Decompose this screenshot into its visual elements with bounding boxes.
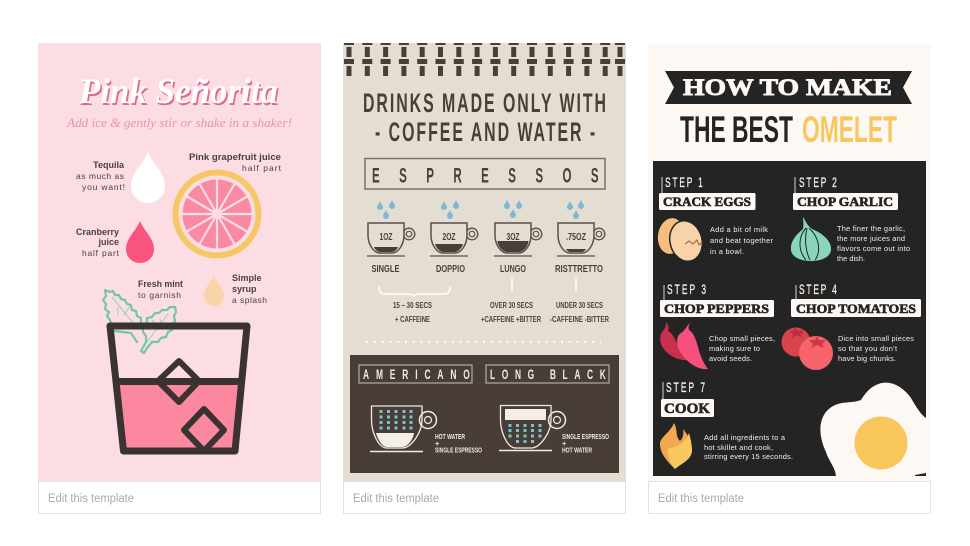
- text: step 1 body: and beat together: [710, 236, 774, 245]
- label: tequila: as much as: [76, 171, 124, 181]
- text: step 7 body: Add all ingredients to a: [704, 433, 786, 442]
- text: step 3 body: Chop small pieces,: [709, 334, 775, 343]
- drink: single: [367, 200, 415, 275]
- label: americano recipe: [435, 432, 482, 454]
- heading: the best omelet: OMELET: [802, 109, 897, 150]
- label: grapefruit juice: [189, 152, 282, 173]
- label: long black recipe: SINGLE ESPRESSO: [562, 432, 609, 441]
- text: step 1 body: [710, 225, 774, 256]
- text: step 1 body: Add a bit of milk: [710, 225, 768, 234]
- icon: long black cup: [499, 406, 566, 450]
- icon: garlic: [791, 217, 831, 261]
- label: tequila: you want!: [82, 182, 125, 192]
- label: cranberry juice: Cranberry: [76, 227, 119, 237]
- chart-like illustration: cocktail glass: [110, 326, 247, 451]
- text: step 7 body: hot skillet and cook,: [704, 443, 773, 452]
- icon: mint leaves: [103, 290, 176, 353]
- text: step 7 body: [704, 433, 793, 461]
- footer: edit template 1: [38, 482, 320, 514]
- icon: syrup drop: [204, 275, 224, 306]
- heading: drinks made only with coffee and water: DRINKS MADE ONLY WITH: [363, 88, 606, 118]
- icon: fried egg: [820, 383, 926, 477]
- footer: edit template 1: Edit this template: [48, 493, 134, 505]
- caption: single and doppio timing: + CAFFEINE: [395, 315, 430, 324]
- label: fresh mint: Fresh mint: [138, 279, 183, 289]
- text: step 4 body: so that you don't: [838, 344, 897, 353]
- icon: grapefruit slice: [176, 172, 258, 256]
- drink: doppio: 2OZ: [442, 232, 456, 243]
- label: long black recipe: [562, 432, 609, 454]
- icon: tomatoes: [782, 327, 833, 370]
- dark steps panel: [653, 161, 926, 477]
- banner: how to make: [665, 71, 912, 104]
- label: simple syrup: syrup: [232, 284, 257, 294]
- drink: single: 1OZ: [380, 232, 392, 243]
- label: americano recipe: SINGLE ESPRESSO: [435, 446, 482, 454]
- label: tequila: Tequila: [93, 160, 125, 170]
- icon: americano cup: [370, 406, 436, 452]
- drink: ristretto: RISTTRETTO: [555, 264, 603, 275]
- heading: drinks made only with coffee and water: [363, 88, 606, 147]
- text: step 2 body: flavors come out into: [837, 244, 910, 253]
- decorative top pattern: [344, 43, 625, 76]
- icon: eggs: [656, 216, 706, 265]
- text: step 4 body: Dice into small pieces: [838, 334, 914, 343]
- label: americano recipe: +: [435, 439, 440, 448]
- label: simple syrup: Simple: [232, 273, 262, 283]
- label: long black recipe: HOT WATER: [562, 446, 592, 454]
- label: tequila: [76, 160, 125, 192]
- step 7: cook: [660, 381, 793, 469]
- panel: how to make the best omelet: [648, 43, 931, 481]
- step 3: chop peppers: CHOP PEPPERS: [664, 301, 769, 316]
- label: long black recipe: +: [562, 439, 567, 448]
- text: step 3 body: avoid seeds.: [709, 354, 752, 363]
- label: simple syrup: [232, 273, 267, 305]
- heading: drinks made only with coffee and water: - COFFEE AND WATER -: [375, 117, 595, 147]
- footer: edit template 2: [344, 482, 626, 514]
- title: Pink Senorita: Pink Señorita: [80, 73, 279, 113]
- heading box: espressos: ESPRESSOS: [372, 164, 599, 187]
- drink: doppio: [430, 200, 478, 275]
- drink: doppio: DOPPIO: [436, 264, 465, 275]
- drink: lungo: [494, 200, 542, 275]
- title: Pink Senorita: Pink Señorita: [78, 71, 278, 111]
- caption: single and doppio timing: [393, 301, 433, 324]
- step 2: chop garlic: CHOP GARLIC: [797, 194, 893, 209]
- step 1: crack eggs: [656, 176, 774, 265]
- footer: edit template 3: Edit this template: [658, 493, 744, 505]
- caption: ristretto timing: UNDER 30 SECS: [556, 301, 603, 310]
- heading: the best omelet: THE BEST: [680, 109, 793, 150]
- panel: americano and long black: [350, 355, 619, 473]
- label: cranberry juice: half part: [82, 248, 120, 258]
- label: fresh mint: to garnish: [138, 290, 181, 300]
- caption: lungo timing: +CAFFEINE +BITTER: [481, 315, 541, 324]
- step 4: chop tomatoes: STEP 4: [799, 283, 837, 298]
- drink: lungo: 3OZ: [506, 232, 520, 243]
- text: step 3 body: [709, 334, 775, 363]
- step 3: chop peppers: [660, 283, 775, 369]
- text: step 2 body: The finer the garlic,: [837, 224, 905, 233]
- step 7: cook: COOK: [664, 401, 710, 417]
- heading box: long black: LONG BLACK: [490, 368, 606, 383]
- text: step 2 body: [837, 224, 910, 263]
- text: step 4 body: have big chunks.: [838, 354, 896, 363]
- step 1: crack eggs: CRACK EGGS: [663, 194, 751, 209]
- text: step 1 body: in a bowl.: [710, 247, 744, 256]
- subtitle: Add ice & gently stir or shake in a shaker!: [66, 116, 292, 130]
- caption: ristretto timing: -CAFFEINE -BITTER: [550, 315, 609, 324]
- step 2: chop garlic: [791, 176, 910, 263]
- banner: how to make: HOW TO MAKE: [683, 75, 892, 100]
- drink: ristretto: [555, 200, 605, 275]
- heading box: americano: AMERICANO: [363, 368, 470, 383]
- brackets and connectors: [379, 279, 576, 296]
- label: simple syrup: a splash: [232, 295, 267, 305]
- text: step 4 body: [838, 334, 914, 363]
- step 3: chop peppers: STEP 3: [667, 283, 706, 298]
- icon: cranberry drop: [126, 221, 154, 263]
- caption: lungo timing: OVER 30 SECS: [490, 301, 533, 310]
- drink: lungo: LUNGO: [500, 264, 526, 275]
- footer: edit template 2: Edit this template: [353, 493, 439, 505]
- panel: espresso drinks guide: [343, 43, 626, 481]
- step 4: chop tomatoes: CHOP TOMATOES: [796, 301, 916, 316]
- text: step 2 body: the more juices and: [837, 234, 905, 243]
- caption: lungo timing: [481, 301, 541, 324]
- panel: Pink Senorita cocktail recipe: [38, 43, 321, 481]
- label: cranberry juice: juice: [97, 237, 119, 247]
- icon: white tequila drop: [131, 152, 165, 203]
- text: step 3 body: making sure to: [709, 344, 760, 353]
- step 2: chop garlic: STEP 2: [799, 176, 837, 191]
- label: americano recipe: HOT WATER: [435, 432, 465, 441]
- text: step 2 body: the dish.: [837, 254, 865, 263]
- label: fresh mint: [138, 279, 183, 300]
- caption: single and doppio timing: 15 – 30 SECS: [393, 301, 433, 310]
- step 7: cook: STEP 7: [666, 381, 705, 396]
- step 4: chop tomatoes: [782, 283, 921, 370]
- label: grapefruit juice: half part: [242, 163, 282, 173]
- label: grapefruit juice: Pink grapefruit juice: [189, 152, 281, 162]
- icon: chili peppers: [660, 322, 708, 369]
- footer: edit template 3: [648, 482, 930, 514]
- text: step 7 body: stirring every 15 seconds.: [704, 452, 793, 461]
- step 1: crack eggs: STEP 1: [665, 176, 703, 191]
- drink: single: SINGLE: [372, 264, 400, 275]
- label: cranberry juice: [76, 227, 120, 258]
- drink: ristretto: .75OZ: [566, 232, 586, 243]
- icon: ice cubes: [158, 361, 224, 451]
- caption: ristretto timing: [550, 301, 609, 324]
- icon: flame: [660, 423, 692, 469]
